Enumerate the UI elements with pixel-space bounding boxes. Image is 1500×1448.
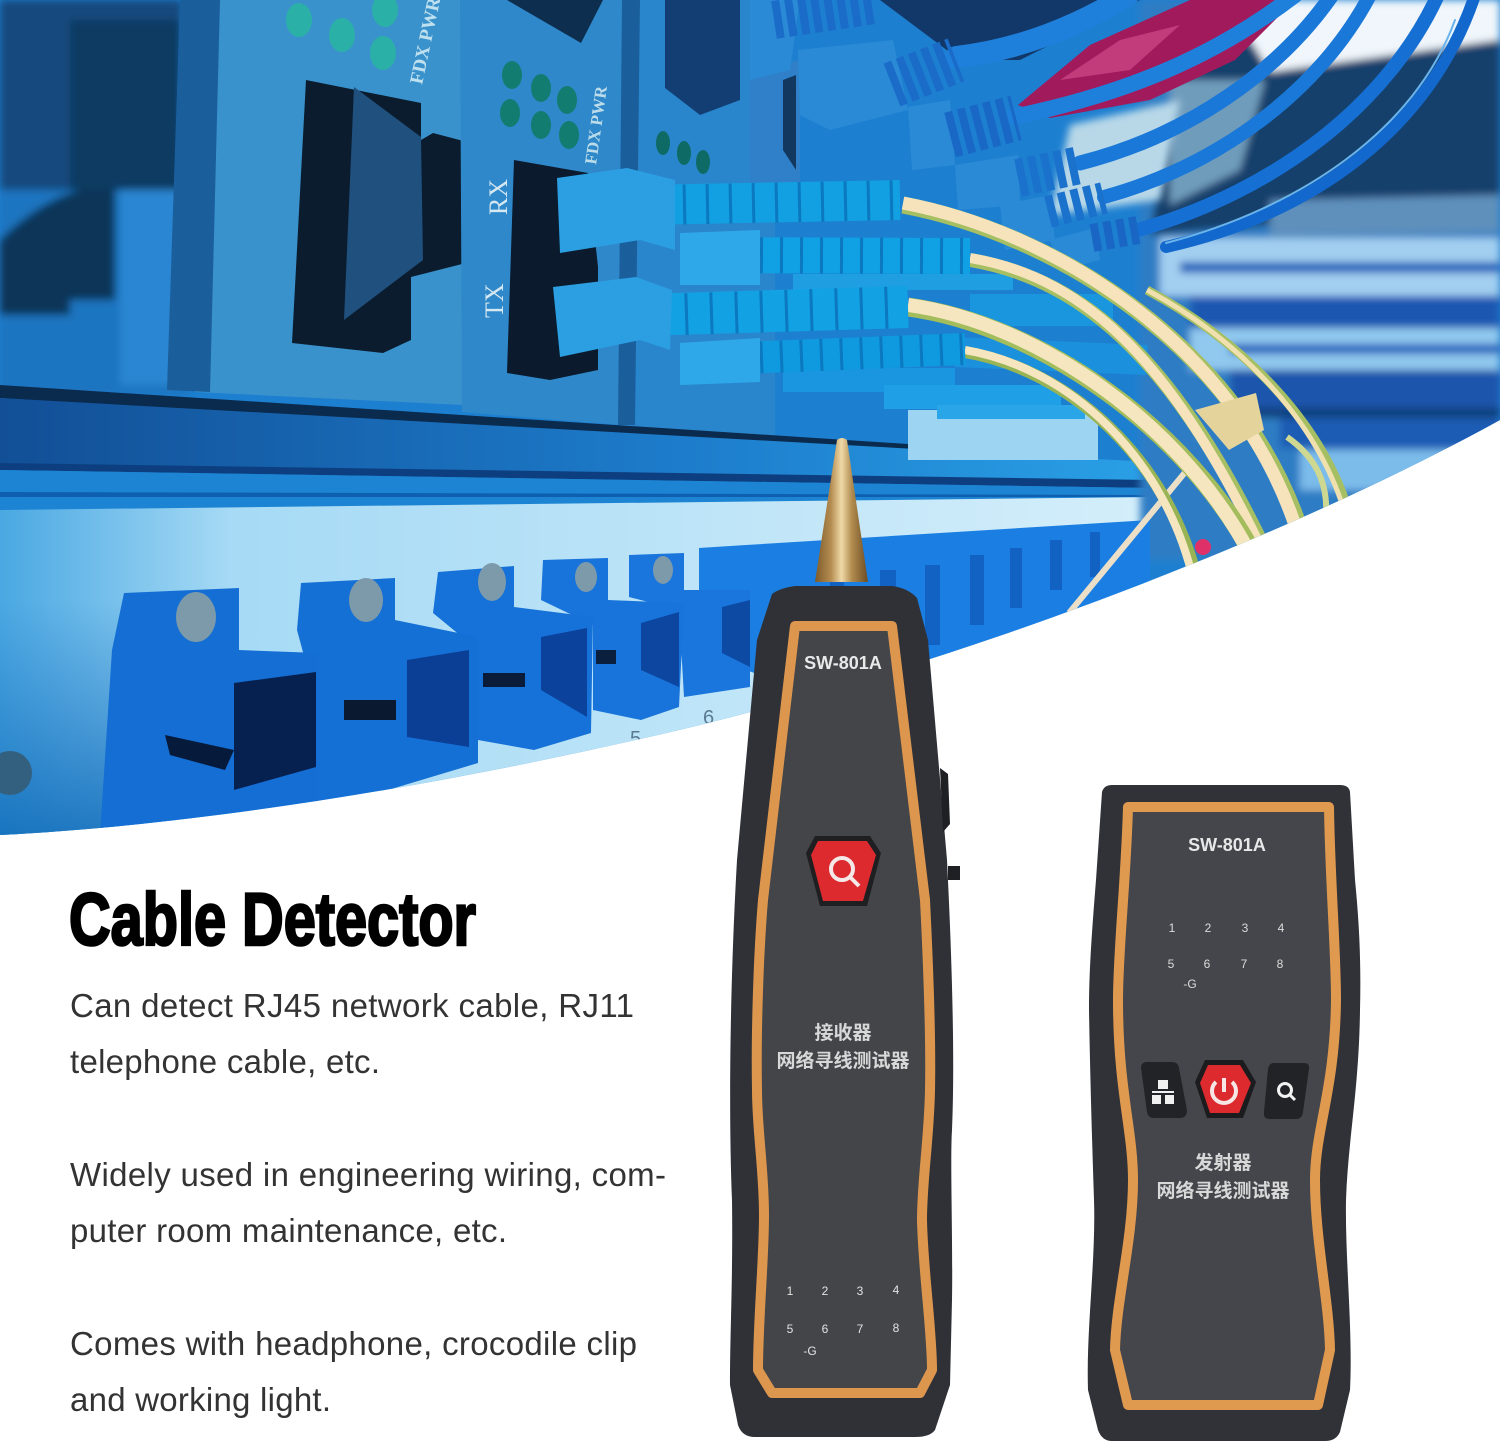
module panel 2: FDX PWR	[581, 84, 611, 166]
module panel 3	[618, 0, 775, 440]
server rack on the right	[1140, 0, 1500, 560]
transmitter indicator numbers	[1168, 921, 1285, 991]
transmitter indicator numbers: 2	[1205, 921, 1212, 935]
text block: description: Can detect RJ45 network cable, RJ11	[70, 987, 634, 1024]
photo: network patch panel with cables	[0, 0, 1500, 840]
receiver Chinese labels: 接收器	[814, 1022, 872, 1044]
receiver indicator numbers: 2	[822, 1284, 829, 1298]
button: red power	[1195, 1060, 1256, 1118]
small cyan connectors behind fibres	[783, 282, 1147, 460]
receiver device	[730, 438, 960, 1437]
module panel 2	[460, 0, 628, 425]
module panel 2: TX	[480, 283, 509, 318]
module panel 2: RX	[484, 179, 513, 215]
blue RJ45 ports row: 5	[630, 728, 641, 750]
button: search	[1264, 1063, 1309, 1119]
transmitter indicator numbers: -G	[1183, 977, 1197, 991]
transmitter Chinese labels: 发射器	[1194, 1151, 1252, 1174]
right side grip tabs	[940, 768, 960, 880]
transmitter device	[1088, 785, 1360, 1441]
blue RJ45 ports row: 6	[703, 707, 714, 729]
shelf band	[0, 398, 1150, 840]
text block: description	[70, 987, 666, 1418]
blue patch cables	[956, 0, 1475, 247]
module panel 1	[167, 0, 471, 405]
transmitter indicator numbers: 5	[1168, 957, 1175, 971]
receiver indicator numbers: 4	[893, 1283, 900, 1297]
transmitter indicator numbers: 7	[1241, 957, 1248, 971]
transmitter Chinese labels: 网络寻线测试器	[1156, 1179, 1290, 1202]
text block: description: puter room maintenance, etc.	[70, 1212, 507, 1249]
transmitter indicator numbers: 8	[1277, 957, 1284, 971]
transmitter body	[1088, 785, 1360, 1441]
receiver orange frame	[757, 626, 932, 1393]
receiver indicator numbers: 6	[822, 1322, 829, 1336]
receiver model label: SW-801A	[804, 653, 882, 673]
ribbed cable boots	[774, 5, 1138, 238]
receiver indicator numbers	[787, 1283, 900, 1358]
cyan fibre boots and connectors	[553, 168, 970, 385]
transmitter indicator numbers: 3	[1242, 921, 1249, 935]
receiver indicator numbers: 1	[787, 1284, 794, 1298]
text block: description: Widely used in engineering wiring, com-	[70, 1156, 666, 1193]
receiver indicator numbers: 8	[893, 1321, 900, 1335]
receiver search button	[806, 836, 881, 906]
receiver indicator numbers: -G	[803, 1344, 817, 1358]
receiver indicator numbers: 3	[857, 1284, 864, 1298]
icon: brass probe tip	[815, 438, 868, 582]
text block: description: Comes with headphone, crocodile clip	[70, 1325, 637, 1362]
receiver indicator numbers: 7	[857, 1322, 864, 1336]
far-left blurred equipment block	[0, 0, 190, 395]
transmitter indicator numbers: 6	[1204, 957, 1211, 971]
cream fibre cables	[903, 203, 1348, 613]
transmitter Chinese labels	[1156, 1151, 1290, 1202]
transmitter orange frame	[1115, 807, 1336, 1405]
transmitter indicator numbers: 4	[1278, 921, 1285, 935]
receiver indicator numbers: 5	[787, 1322, 794, 1336]
dark bottom edge of modules	[0, 385, 908, 449]
status LEDs	[286, 0, 398, 70]
transmitter model label: SW-801A	[1188, 835, 1266, 855]
RJ45 blue plugs and boots, top area	[750, 0, 1295, 270]
button: network	[1141, 1062, 1187, 1118]
blue RJ45 ports row	[100, 520, 1150, 835]
transmitter indicator numbers: 1	[1169, 921, 1176, 935]
receiver Chinese labels	[776, 1022, 910, 1072]
text block: description: and working light.	[70, 1381, 331, 1418]
title: Cable Detector	[69, 878, 476, 961]
black fibre port cover	[292, 80, 471, 353]
receiver body	[730, 586, 953, 1437]
receiver Chinese labels: 网络寻线测试器	[776, 1049, 910, 1072]
text block: description: telephone cable, etc.	[70, 1043, 380, 1080]
